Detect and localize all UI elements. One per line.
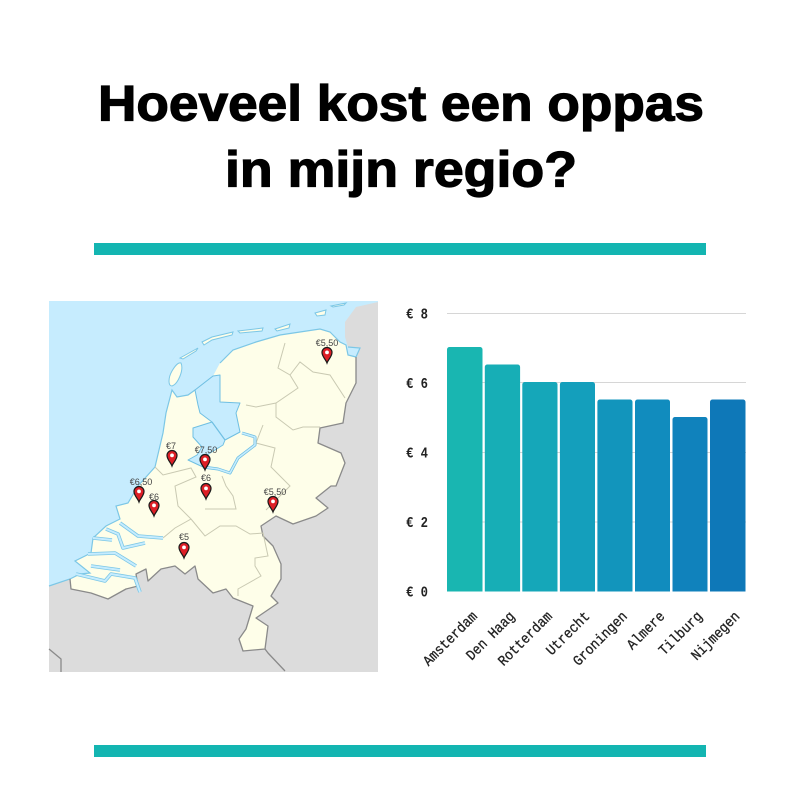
x axis labels: Nijmegen [689,609,744,664]
bottom divider bar [94,745,706,757]
bar chart [406,306,746,670]
IJsselmeer [188,375,240,467]
pin: Almere [195,445,217,470]
pin: Den Haag: €6,50 [130,477,152,487]
pin: Amsterdam: €7 [166,441,176,451]
x axis labels [421,609,744,670]
delta channels [76,523,163,592]
international border [49,357,356,672]
y axis labels: € 0 [406,584,428,602]
x axis labels: Groningen [571,609,632,670]
y axis labels: € 6 [406,376,428,393]
y axis labels [406,306,428,602]
pin: Tilburg: €5 [179,532,189,542]
x axis labels: Almere [624,609,669,654]
pin: Tilburg [179,532,189,558]
land: Netherlands [70,329,356,651]
map sea background [49,301,378,672]
pin: Nijmegen [264,487,286,512]
y axis labels: € 2 [406,515,428,532]
pin: Groningen: €5,50 [316,338,338,348]
pin: Almere: €7,50 [195,445,217,455]
x axis labels: Amsterdam [421,609,482,670]
province borders [155,343,345,596]
y axis labels: € 8 [406,306,428,324]
x axis labels: Den Haag [464,609,519,664]
title: in mijn regio? [225,142,577,198]
coastline [49,329,360,586]
pin: Utrecht: €6 [201,473,211,483]
x axis labels: Tilburg [656,609,707,659]
pin: Nijmegen: €5,50 [264,487,286,497]
Wadden islands [169,303,346,386]
pin: Groningen [316,338,338,363]
pin: Den Haag [130,477,152,502]
pin: Amsterdam [166,441,177,466]
title: Hoeveel kost een oppas [98,76,704,132]
x axis labels: Rotterdam [496,609,557,670]
title [98,76,704,198]
pin: Rotterdam: €6 [149,492,159,502]
inland water lines [203,422,255,473]
y axis labels: € 4 [406,446,428,462]
pin: Rotterdam [149,492,159,516]
neighbouring countries [49,302,378,672]
top divider bar [94,243,706,255]
x axis labels: Utrecht [544,609,594,659]
pin: Utrecht [201,473,211,499]
map of the Netherlands [49,301,378,672]
bars [447,347,746,592]
